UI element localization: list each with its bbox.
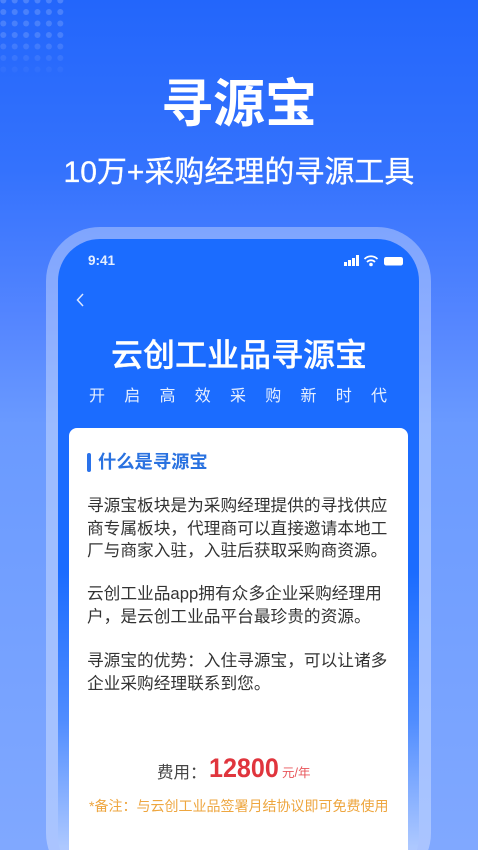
status bar time: 9:41 (88, 253, 115, 268)
decorative dot pattern (0, 0, 64, 68)
paragraph: users: 云创工业品app拥有众多企业采购经理用 (87, 584, 382, 603)
section heading: 什么是寻源宝 (98, 451, 208, 472)
panel: info card (69, 428, 408, 850)
paragraph: intro: 商专属板块，代理商可以直接邀请本地工 (87, 519, 387, 538)
paragraph: users: 户，是云创工业品平台最珍贵的资源。 (87, 607, 371, 626)
subtitle: 10万+采购经理的寻源工具 (64, 156, 414, 189)
paragraph: users (87, 584, 382, 626)
title: 寻源宝 (161, 76, 317, 134)
phone frame (46, 227, 431, 850)
fee label: 费用： (157, 764, 206, 782)
section marker (87, 453, 91, 472)
footnote: *备注：与云创工业品签署月结协议即可免费使用 (89, 798, 388, 814)
fee amount: 12800 (209, 753, 279, 783)
app tagline: 开启高效采购新时代 (89, 388, 406, 405)
paragraph: intro (87, 496, 387, 560)
paragraph: intro: 寻源宝板块是为采购经理提供的寻找供应 (87, 496, 387, 515)
status bar icons (344, 255, 403, 266)
fee unit: 元/年 (282, 766, 310, 780)
phone screen (58, 239, 419, 850)
paragraph: advantage: 企业采购经理联系到您。 (87, 674, 271, 693)
paragraph: advantage: 寻源宝的优势：入住寻源宝，可以让诸多 (87, 651, 387, 670)
paragraph: intro: 厂与商家入驻，入驻后获取采购商资源。 (87, 541, 387, 560)
app headline: 云创工业品寻源宝 (111, 337, 367, 373)
paragraph: advantage (87, 651, 387, 693)
back arrow (76, 294, 84, 306)
